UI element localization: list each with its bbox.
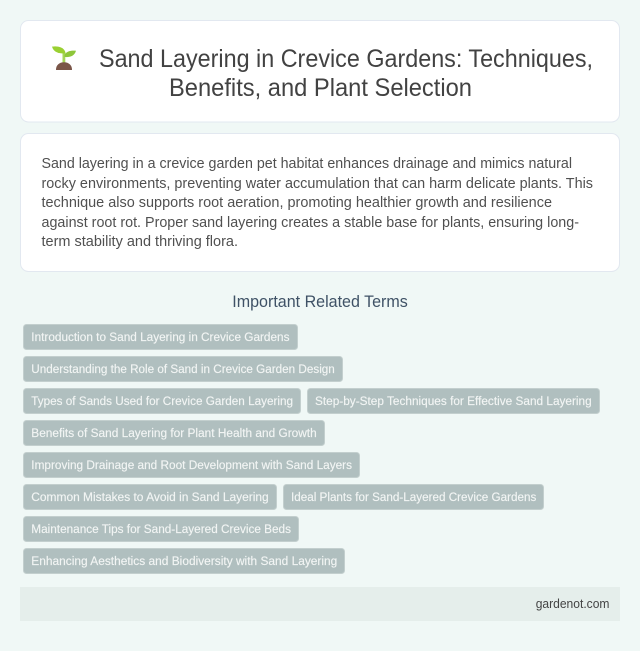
- panel: title card: [20, 20, 620, 122]
- tag: Improving Drainage and Root Development with Sand Layers: [31, 458, 352, 472]
- tag: [284, 484, 544, 510]
- tag: [24, 356, 342, 382]
- text block: summary: Sand layering in a crevice garden pet habitat enhances drainage and mimics natural: [42, 156, 572, 172]
- tag: Understanding the Role of Sand in Crevice Garden Design: [31, 362, 335, 376]
- tag: [24, 548, 344, 574]
- panel: summary paragraph: [20, 134, 620, 272]
- tag: [24, 420, 324, 446]
- icon: seedling: [52, 46, 76, 70]
- footer source text: gardenot.com: [536, 596, 610, 611]
- text block: summary: rocky environments, preventing water accumulation that can harm delicate plants. This: [42, 176, 593, 192]
- tag: [308, 388, 600, 414]
- tag: Common Mistakes to Avoid in Sand Layering: [31, 490, 269, 504]
- tag: Enhancing Aesthetics and Biodiversity with Sand Layering: [31, 554, 337, 568]
- tag: Types of Sands Used for Crevice Garden Layering: [31, 394, 293, 408]
- title: [99, 46, 593, 102]
- text block: summary: [42, 156, 593, 250]
- tag: Introduction to Sand Layering in Crevice Gardens: [31, 330, 290, 344]
- heading: important related terms: Important Related Terms: [232, 293, 408, 311]
- tag: [24, 484, 276, 510]
- tag: [24, 516, 298, 542]
- tag: Ideal Plants for Sand-Layered Crevice Gardens: [291, 490, 536, 504]
- text block: summary: term stability and thriving flora.: [42, 234, 238, 250]
- title: Benefits, and Plant Selection: [169, 75, 472, 102]
- tag: [24, 324, 298, 350]
- title: Sand Layering in Crevice Gardens: Techniques,: [99, 46, 593, 73]
- tag: [24, 388, 300, 414]
- text block: summary: technique also supports root aeration, promoting healthier growth and resilience: [42, 195, 552, 211]
- tag: Step-by-Step Techniques for Effective Sand Layering: [315, 394, 592, 408]
- tag: Maintenance Tips for Sand-Layered Crevice Beds: [31, 522, 291, 536]
- footer: [20, 587, 620, 621]
- tag: Benefits of Sand Layering for Plant Health and Growth: [31, 426, 317, 440]
- tag list: [24, 324, 600, 574]
- tag: [24, 452, 360, 478]
- text block: summary: against root rot. Proper sand layering creates a stable base for plants, ensuring long-: [42, 215, 579, 231]
